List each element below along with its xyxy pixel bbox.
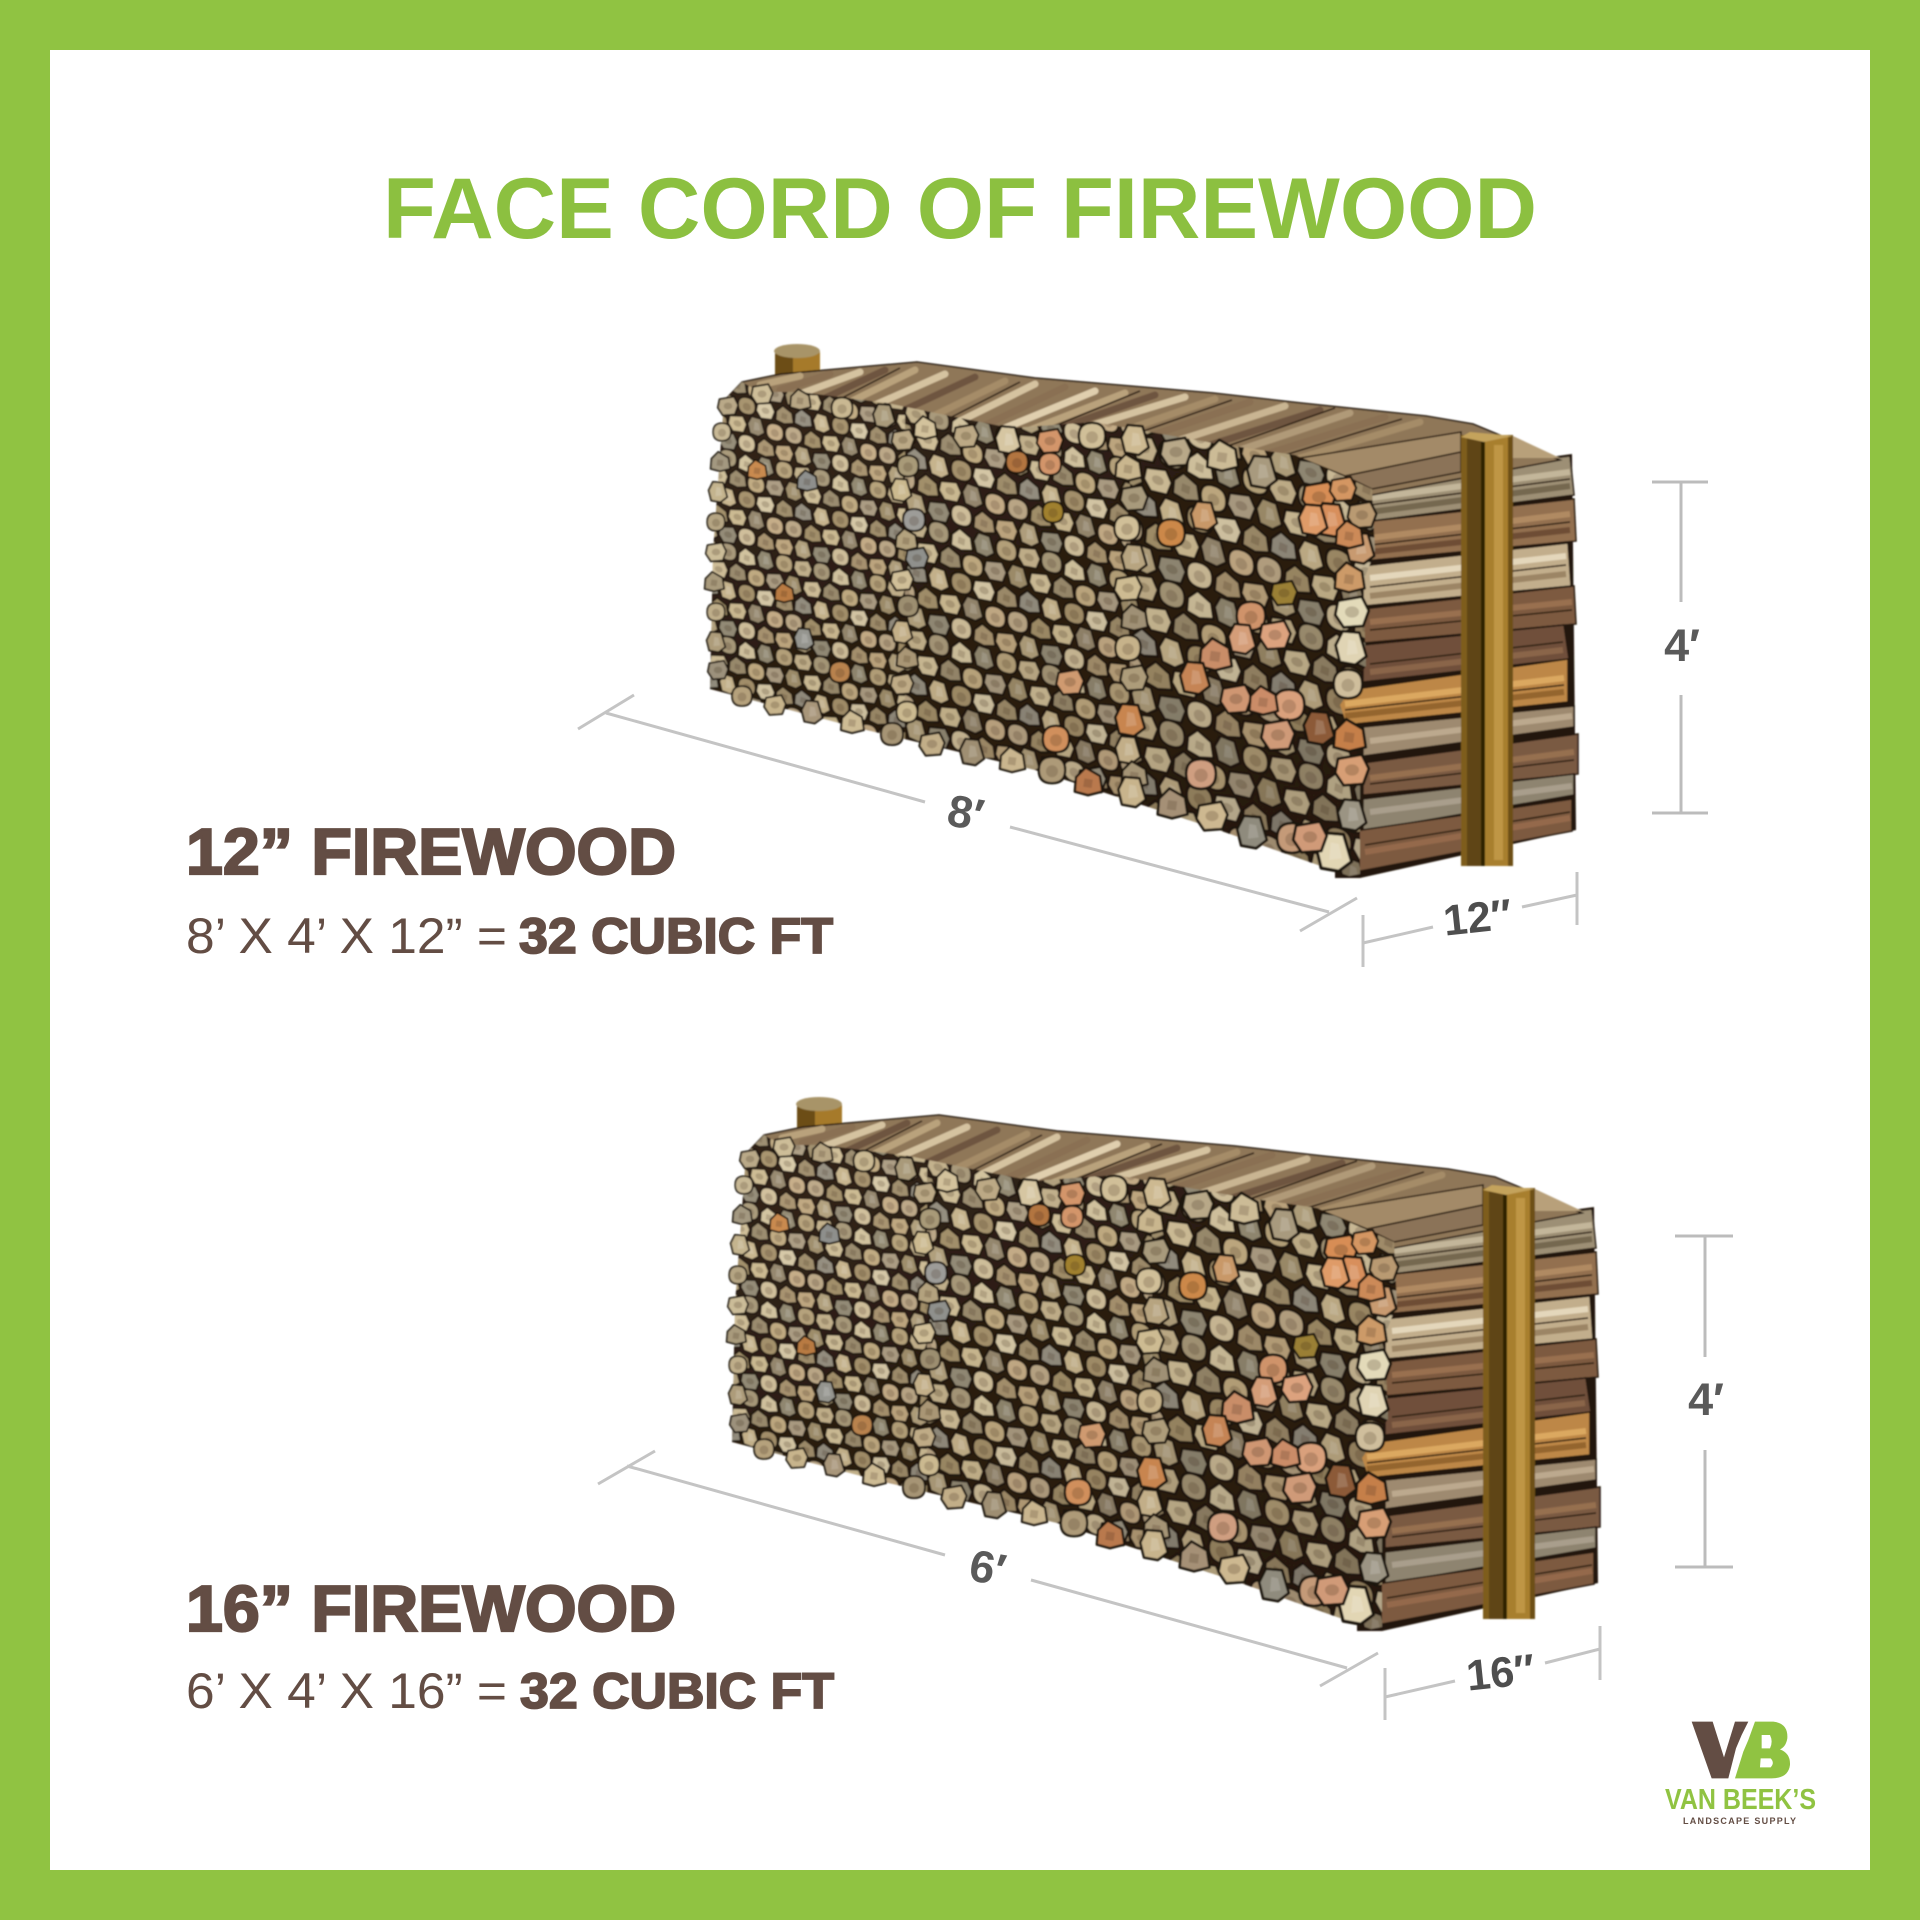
dimension: depth 16 in: 16″ bbox=[1464, 1646, 1537, 1701]
heading: 16 inch firewood: 16” FIREWOOD bbox=[186, 1572, 676, 1645]
dimension: height 4 ft bbox=[1675, 1236, 1733, 1567]
woodpile illustration: 8 ft by 4 ft by 12 in bbox=[700, 344, 1578, 890]
formula: 16 inch: 6’ X 4’ X 16” = bbox=[186, 1663, 507, 1719]
dimension: length 8 ft: 8′ bbox=[944, 785, 988, 841]
heading: 12 inch firewood: 12” FIREWOOD bbox=[186, 815, 676, 888]
title: FACE CORD OF FIREWOOD bbox=[383, 161, 1537, 257]
dimension: height 4 ft: 4′ bbox=[1664, 620, 1700, 671]
logo wordmark: VAN BEEK’S bbox=[1665, 1784, 1816, 1816]
formula: 16 inch: 32 CUBIC FT bbox=[520, 1663, 834, 1719]
logo: Van Beek's Landscape Supply bbox=[1665, 1722, 1816, 1826]
dimension: length 8 ft bbox=[578, 695, 1357, 931]
woodpile illustration: 6 ft by 4 ft by 16 in bbox=[722, 1097, 1600, 1643]
panel: 16 inch firewood bbox=[186, 1097, 1733, 1720]
dimension: depth 16 in bbox=[1385, 1626, 1600, 1720]
dimension: height 4 ft: 4′ bbox=[1688, 1374, 1724, 1425]
panel: 12 inch firewood bbox=[186, 344, 1708, 967]
formula: 12 inch: 32 CUBIC FT bbox=[519, 908, 833, 964]
logo mark: VB bbox=[1692, 1722, 1790, 1778]
dimension: depth 12 in: 12″ bbox=[1441, 891, 1514, 946]
dimension: height 4 ft bbox=[1652, 482, 1708, 813]
logo tagline: LANDSCAPE SUPPLY bbox=[1683, 1816, 1796, 1826]
dimension: length 6 ft: 6′ bbox=[966, 1540, 1010, 1596]
formula: 12 inch: 8’ X 4’ X 12” = bbox=[186, 908, 507, 964]
dimension: depth 12 in bbox=[1363, 872, 1577, 967]
dimension: length 6 ft bbox=[598, 1451, 1378, 1686]
